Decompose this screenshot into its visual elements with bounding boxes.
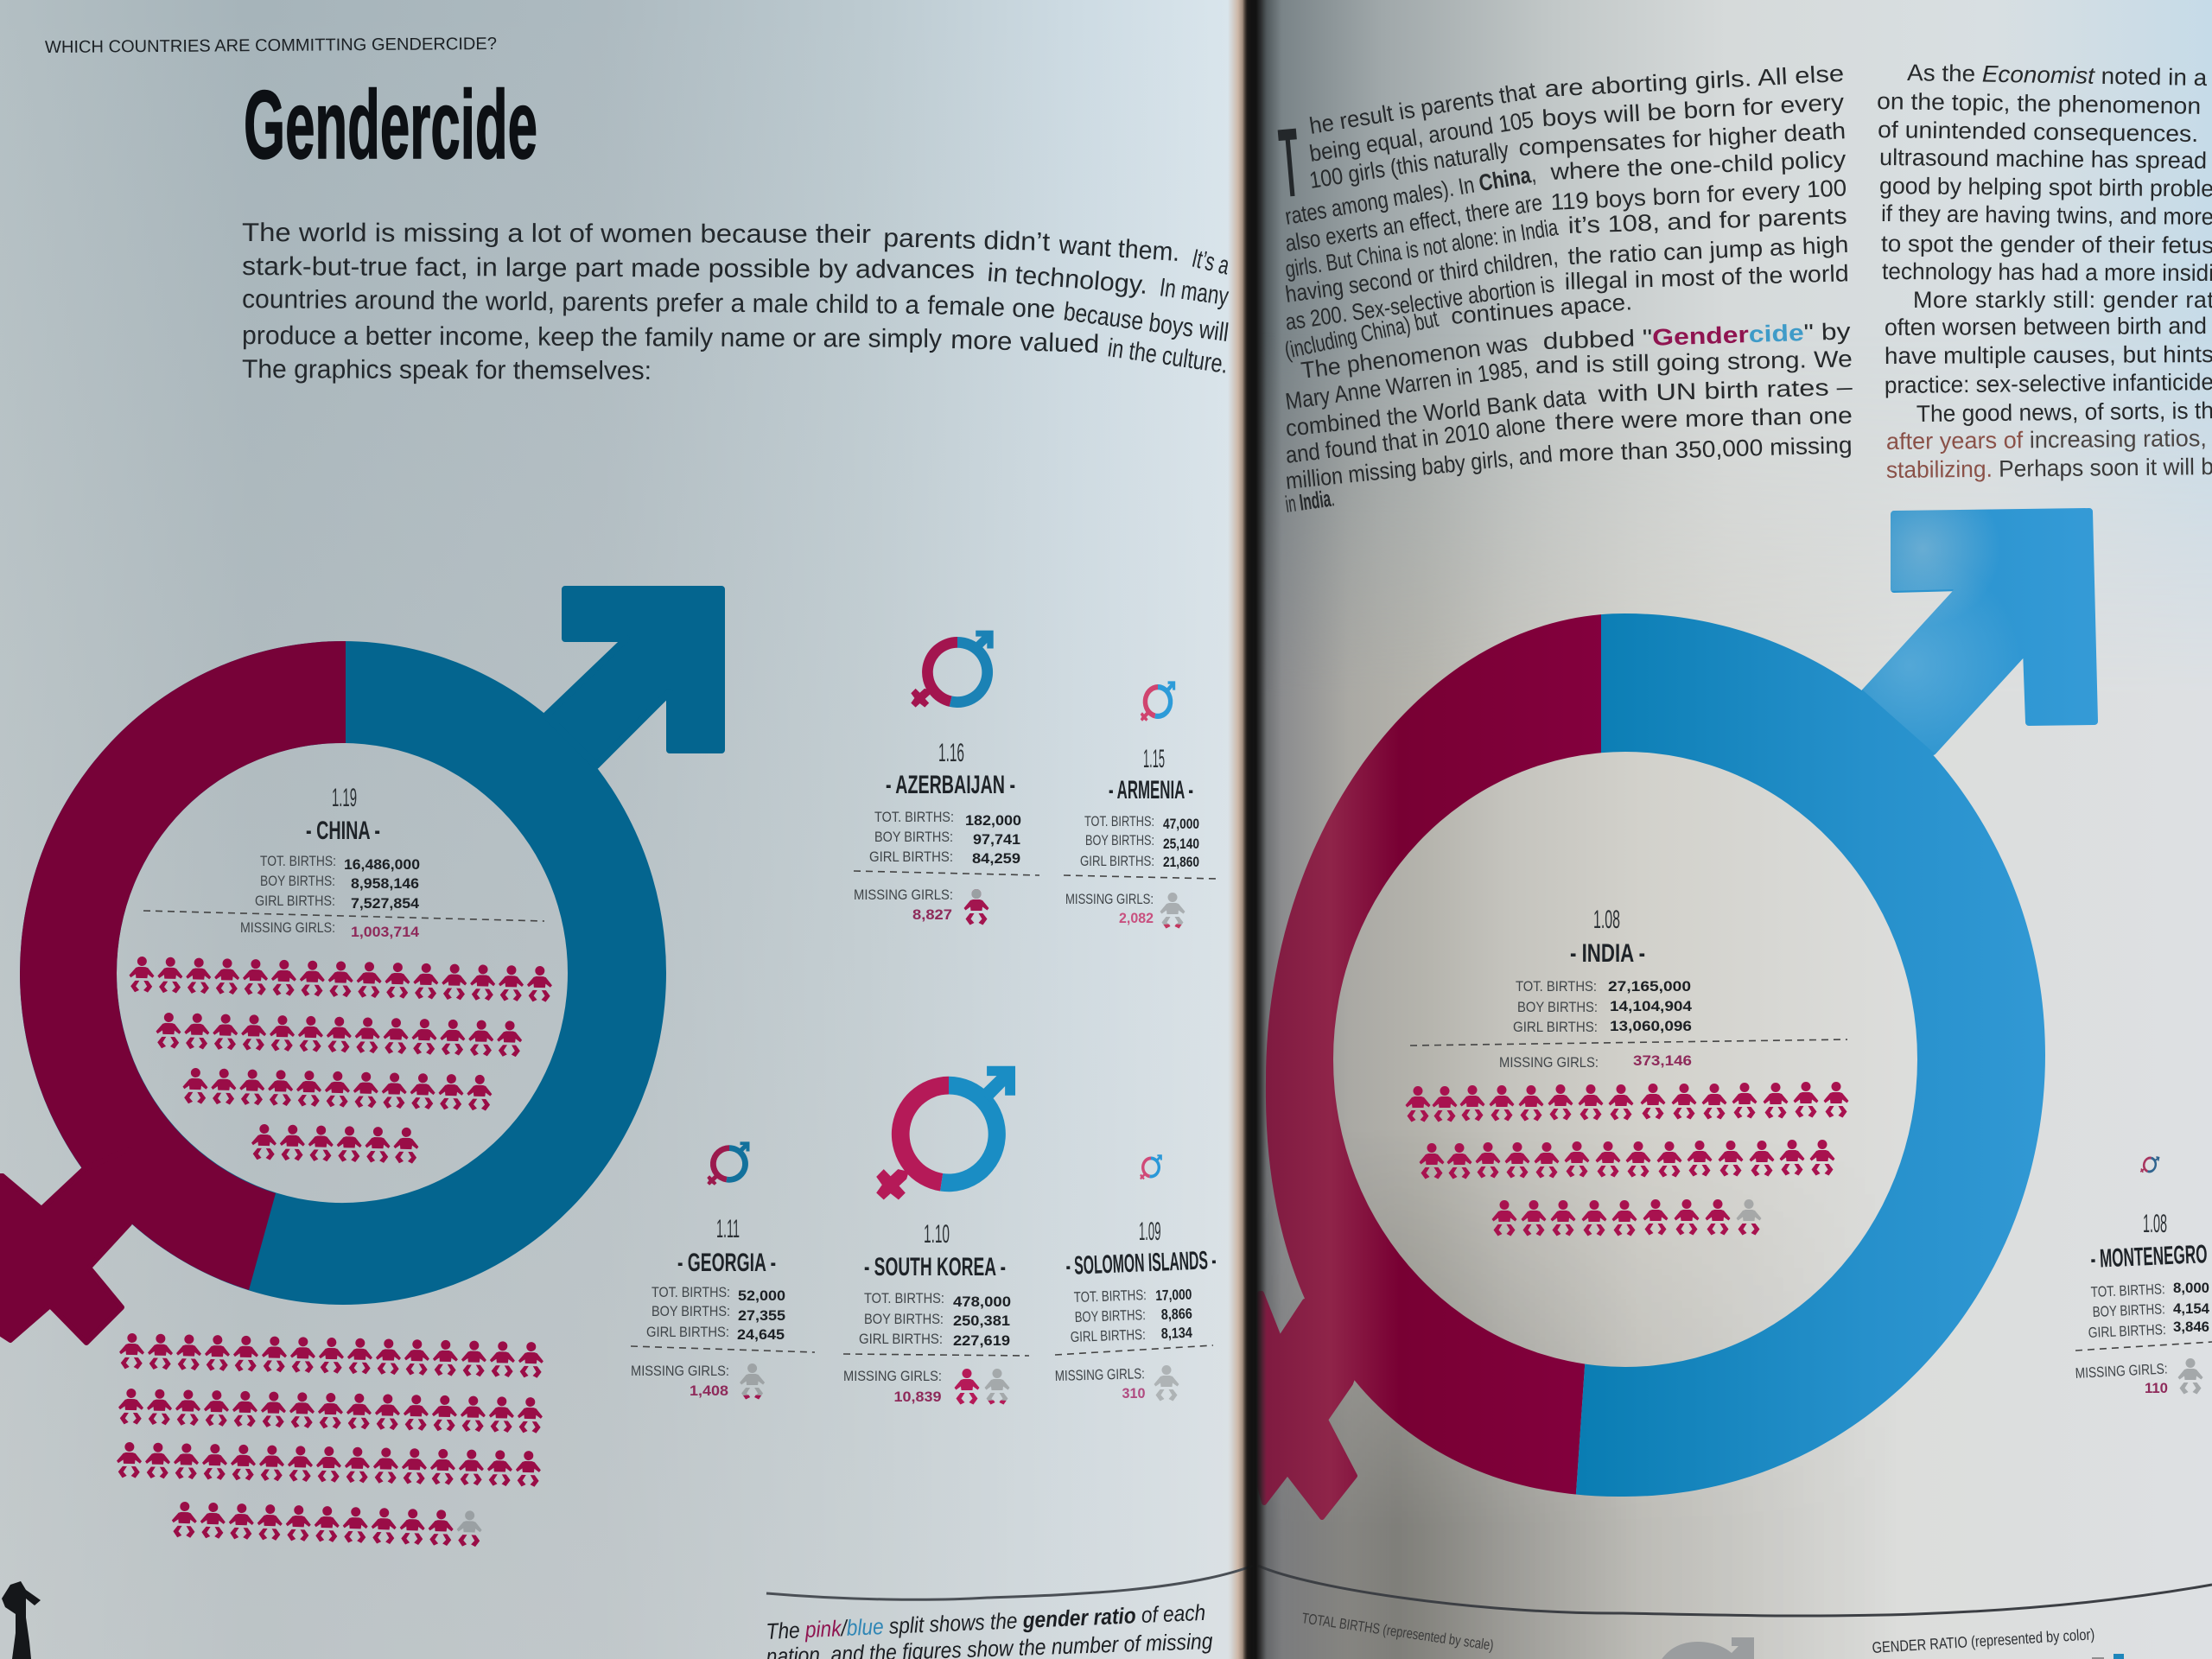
intro text block: countries around the world, parents prefer a male child to a — [242, 285, 920, 320]
georgia stats: 1.11 — [716, 1215, 740, 1243]
south korea stats: TOT. BIRTHS: — [864, 1290, 944, 1306]
georgia stats: TOT. BIRTHS: — [652, 1284, 730, 1300]
body text column 2: after years of increasing ratios, — [1886, 425, 2207, 454]
china gender symbol — [0, 589, 721, 1343]
body text column 1: combined the World Bank data — [1284, 383, 1588, 442]
intro text block: female one — [927, 291, 1056, 324]
icon: montenegro baby — [2177, 1358, 2203, 1395]
azerbaijan stats: BOY BIRTHS: — [874, 829, 953, 845]
china baby pictogram — [117, 957, 552, 1547]
georgia stats: GIRL BIRTHS: — [646, 1324, 729, 1340]
solomon islands stats: 310 — [1122, 1385, 1146, 1402]
azerbaijan stats: GIRL BIRTHS: — [869, 849, 953, 865]
running head: WHICH COUNTRIES ARE COMMITTING GENDERCIDE? — [45, 35, 497, 57]
montenegro stats: 3,846 — [2173, 1319, 2209, 1335]
intro text block: more valued — [950, 326, 1100, 359]
georgia stats: MISSING GIRLS: — [631, 1363, 729, 1379]
south korea stats — [843, 1220, 1029, 1405]
intro text block: in technology. — [986, 258, 1148, 300]
china stats: BOY BIRTHS: — [260, 873, 335, 889]
body text column 1: dubbed " Gender cide " by — [1542, 318, 1852, 354]
azerbaijan stats: MISSING GIRLS: — [854, 887, 953, 903]
india stats: 27,165,000 — [1608, 978, 1691, 995]
solomon islands stats: 17,000 — [1155, 1287, 1192, 1304]
south korea stats: 478,000 — [953, 1294, 1011, 1310]
body text column 1: the ratio can jump as high — [1567, 232, 1849, 270]
armenia stats: 47,000 — [1163, 816, 1199, 832]
background: left page — [0, 0, 1253, 1659]
body text column 2: stabilizing. Perhaps soon it will b — [1886, 454, 2212, 483]
body text column 1: 100 girls (this naturally — [1307, 137, 1511, 194]
solomon islands stats: - SOLOMON ISLANDS - — [1065, 1246, 1217, 1281]
georgia stats: 52,000 — [738, 1287, 785, 1304]
georgia stats: - GEORGIA - — [677, 1249, 776, 1277]
body text column 2: to spot the gender of their fetus — [1881, 231, 2212, 258]
india gender symbol — [1260, 512, 2094, 1517]
armenia stats: GIRL BIRTHS: — [1080, 853, 1154, 869]
footer curve left — [766, 1566, 1253, 1599]
solomon islands stats: 8,866 — [1160, 1306, 1192, 1323]
intro text block: because boys will — [1062, 297, 1230, 347]
icon: south korea babies — [954, 1369, 1009, 1405]
body text column 1: continues apace. — [1450, 289, 1633, 329]
icon: georgia baby — [740, 1363, 765, 1400]
south korea stats: BOY BIRTHS: — [864, 1311, 944, 1327]
legend label: gender ratio: GENDER RATIO (represented by color) — [1872, 1625, 2095, 1656]
body text column 1: also exerts an effect, there are — [1283, 189, 1544, 257]
body text column 1: Mary Anne Warren in 1985, — [1284, 354, 1529, 415]
georgia stats: BOY BIRTHS: — [652, 1303, 730, 1319]
china stats: 8,958,146 — [351, 875, 419, 892]
body text column 2: often worsen between birth and — [1885, 313, 2207, 340]
footer curve right — [1258, 1566, 2212, 1616]
south korea stats: MISSING GIRLS: — [843, 1368, 942, 1384]
body text column 1: it’s 108, and for parents — [1567, 203, 1847, 238]
south korea stats: 10,839 — [893, 1389, 942, 1405]
montenegro icon — [2140, 1154, 2159, 1176]
south korea stats: - SOUTH KOREA - — [864, 1253, 1006, 1281]
body text column 1: with UN birth rates – — [1597, 374, 1853, 407]
india stats: - INDIA - — [1570, 939, 1645, 968]
georgia stats: 24,645 — [737, 1326, 785, 1343]
body text column 1: being equal, around 105 — [1307, 106, 1535, 167]
background: right page — [1253, 0, 2212, 1659]
icon: armenia baby — [1160, 893, 1185, 928]
body text column 1: he result is parents that — [1307, 77, 1538, 139]
body text column 1: compensates for higher death — [1518, 118, 1847, 161]
intro text block: in the culture. — [1106, 334, 1230, 379]
intro text block: It’s a — [1189, 245, 1232, 281]
montenegro stats: MISSING GIRLS: — [2075, 1360, 2168, 1382]
intro text block: want them. — [1058, 231, 1180, 267]
intro text block: stark-but-true fact, in large part made possible by advances — [242, 252, 975, 284]
armenia stats: 25,140 — [1163, 836, 1199, 852]
china stats: 7,527,854 — [351, 895, 420, 912]
intro text block: parents didn’t — [883, 224, 1051, 257]
azerbaijan stats: 182,000 — [965, 812, 1021, 829]
china stats: 1,003,714 — [351, 924, 420, 940]
body text column 1: boys will be born for every — [1541, 89, 1845, 131]
south korea stats: 250,381 — [953, 1313, 1010, 1329]
india stats — [1410, 906, 1847, 1071]
china stats: GIRL BIRTHS: — [255, 893, 335, 909]
body text column 2 — [1877, 60, 2212, 483]
body text column 1: in India. — [1284, 485, 1336, 518]
intro text block: produce a better income, keep the family name or are simply — [242, 321, 942, 353]
body text column 2: on the topic, the phenomenon — [1877, 88, 2201, 119]
india stats: BOY BIRTHS: — [1517, 999, 1598, 1015]
icon: solomon islands baby — [1154, 1365, 1179, 1402]
intro text block: The graphics speak for themselves: — [242, 355, 652, 385]
montenegro stats: 8,000 — [2173, 1280, 2209, 1296]
montenegro stats: 4,154 — [2173, 1300, 2210, 1317]
china stats: - CHINA - — [306, 817, 380, 845]
georgia stats: 27,355 — [738, 1307, 785, 1324]
india stats: MISSING GIRLS: — [1499, 1054, 1599, 1071]
armenia stats — [1064, 745, 1217, 926]
body text column 2: More starkly still: gender rat — [1913, 287, 2212, 313]
china stats: MISSING GIRLS: — [240, 919, 335, 936]
intro text block: The world is missing a lot of women because their — [242, 219, 871, 249]
body text column 2: of unintended consequences. — [1878, 117, 2198, 147]
china stats: 1.19 — [332, 784, 357, 812]
south korea stats: 1.10 — [924, 1220, 950, 1249]
georgia stats: 1,408 — [690, 1382, 728, 1399]
montenegro stats: BOY BIRTHS: — [2092, 1300, 2165, 1320]
body text column 1: as 200. Sex-selective abortion is — [1284, 270, 1556, 335]
intro text block: In many — [1158, 273, 1230, 311]
china stats — [143, 784, 544, 940]
azerbaijan stats: - AZERBAIJAN - — [886, 771, 1015, 799]
title: Gendercide — [244, 71, 537, 179]
azerbaijan stats: TOT. BIRTHS: — [874, 809, 954, 825]
body text column 2: As the Economist noted in a — [1907, 60, 2208, 91]
solomon islands stats: MISSING GIRLS: — [1055, 1365, 1145, 1384]
china stats: 16,486,000 — [344, 856, 420, 873]
body text column 1: and found that in 2010 alone — [1284, 410, 1547, 468]
body text column 2: ultrasound machine has spread — [1879, 144, 2207, 174]
solomon islands icon — [1140, 1154, 1162, 1179]
body text column 1: and is still going strong. We — [1535, 346, 1853, 378]
montenegro stats: GIRL BIRTHS: — [2088, 1321, 2166, 1341]
south korea stats: GIRL BIRTHS: — [859, 1331, 943, 1347]
footer note: The pink/blue split shows the gender ratio of each — [766, 1599, 1206, 1644]
armenia icon — [1141, 681, 1175, 721]
azerbaijan stats: 84,259 — [972, 850, 1020, 867]
legend icon: color swatches — [2092, 1654, 2124, 1659]
body text column 1 — [1275, 60, 1853, 518]
arrow glare on india symbol — [1863, 510, 1999, 752]
montenegro stats: 110 — [2145, 1380, 2168, 1396]
india stats: 373,146 — [1633, 1052, 1692, 1069]
body text column 1: girls. But China is not alone: in India — [1283, 214, 1560, 283]
armenia stats: MISSING GIRLS: — [1065, 891, 1154, 907]
body text column 2: good by helping spot birth proble — [1879, 173, 2212, 201]
icon: azerbaijan baby — [964, 889, 988, 925]
azerbaijan stats: 1.16 — [938, 739, 964, 767]
south korea icon — [876, 1066, 1015, 1200]
china stats: TOT. BIRTHS: — [260, 853, 336, 869]
solomon islands stats: 1.09 — [1139, 1217, 1161, 1246]
body text column 1: are aborting girls. All else — [1544, 60, 1845, 102]
solomon islands stats: BOY BIRTHS: — [1074, 1306, 1146, 1325]
body text column 1: illegal in most of the world — [1564, 260, 1849, 295]
azerbaijan stats — [854, 739, 1039, 923]
body text column 1: (including China) but — [1282, 306, 1441, 364]
body text column 1: where the one-child policy — [1549, 146, 1847, 185]
azerbaijan icon — [911, 631, 994, 708]
india stats: 1.08 — [1593, 906, 1620, 934]
georgia icon — [707, 1141, 749, 1185]
georgia stats — [631, 1215, 815, 1399]
india baby pictogram — [1405, 1082, 1849, 1236]
azerbaijan stats: 8,827 — [912, 906, 952, 923]
body text column 1: million missing baby girls, and — [1285, 441, 1554, 494]
south korea stats: 227,619 — [953, 1332, 1010, 1349]
icon: silhouette figure — [2, 1581, 41, 1659]
montenegro stats: TOT. BIRTHS: — [2090, 1281, 2165, 1300]
body text column 1: having second or third children, — [1284, 244, 1560, 308]
armenia stats: 1.15 — [1143, 745, 1165, 773]
body text column 1: rates among males). In China, — [1283, 161, 1538, 230]
solomon islands stats: 8,134 — [1160, 1325, 1193, 1342]
azerbaijan stats: 97,741 — [973, 831, 1020, 848]
india stats: GIRL BIRTHS: — [1513, 1019, 1598, 1035]
solomon islands stats: TOT. BIRTHS: — [1073, 1287, 1147, 1306]
body text column 1: T — [1275, 107, 1304, 218]
spine shadow — [1243, 0, 1267, 1659]
india stats: 14,104,904 — [1610, 998, 1693, 1014]
body text column 1: there were more than one — [1554, 403, 1853, 435]
solomon islands stats: GIRL BIRTHS: — [1070, 1326, 1146, 1345]
solomon islands stats — [1055, 1217, 1217, 1402]
legend icon: gray scale symbol — [1659, 1637, 1754, 1659]
armenia stats: - ARMENIA - — [1109, 776, 1193, 804]
armenia stats: BOY BIRTHS: — [1085, 832, 1154, 849]
armenia stats: 21,860 — [1163, 854, 1199, 870]
montenegro stats — [2075, 1210, 2212, 1396]
body text column 1: more than 350,000 missing — [1558, 432, 1853, 467]
intro text block — [242, 219, 1232, 385]
india stats: 13,060,096 — [1610, 1018, 1692, 1034]
body text column 1: 119 boys born for every 100 — [1550, 175, 1847, 215]
body text column 1: The phenomenon was — [1300, 329, 1529, 384]
india stats: TOT. BIRTHS: — [1516, 978, 1597, 995]
armenia stats: TOT. BIRTHS: — [1084, 813, 1154, 830]
montenegro stats: 1.08 — [2143, 1210, 2167, 1238]
body text column 2: have multiple causes, but hints — [1885, 341, 2212, 369]
armenia stats: 2,082 — [1119, 910, 1154, 926]
